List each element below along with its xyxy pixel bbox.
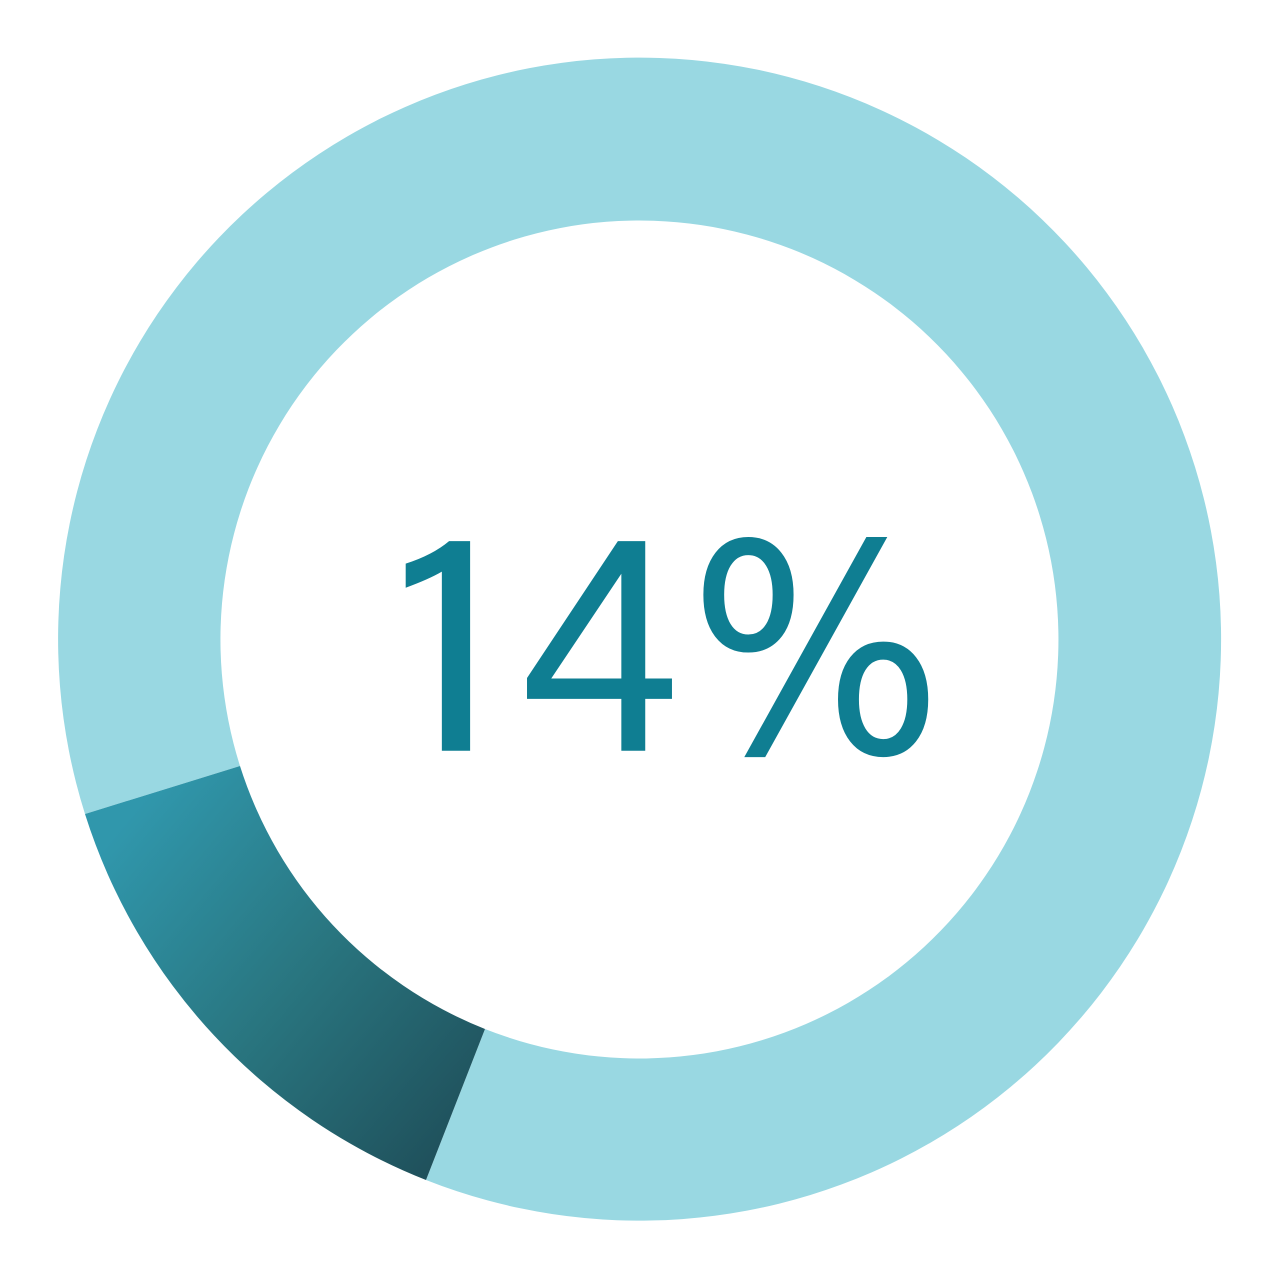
percentage label [365, 482, 943, 822]
percentage label: % [689, 482, 943, 822]
percentage label: 4 [519, 503, 680, 803]
percentage label: 1 [365, 502, 537, 802]
highlighted 14% ring segment [85, 766, 485, 1180]
